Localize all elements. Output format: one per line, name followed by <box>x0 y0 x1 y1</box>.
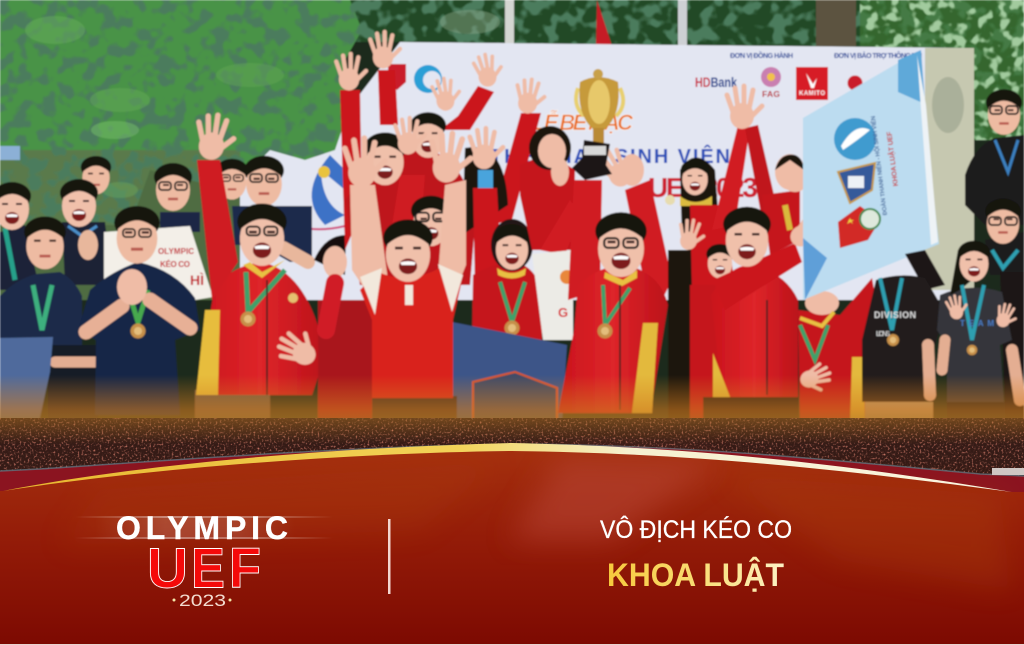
event backdrop <box>240 42 974 300</box>
wordmark UEF: U <box>147 536 188 600</box>
photo scene <box>0 0 1024 418</box>
wordmark UEF <box>147 536 261 600</box>
person: back woman with trophy hand <box>520 126 580 255</box>
small blue banner at left edge <box>0 146 20 160</box>
sponsor logos <box>695 50 922 100</box>
lower red banner <box>0 443 1024 645</box>
person: right side students in black: TEAM <box>960 319 994 328</box>
person: black t-shirt student <box>862 250 945 468</box>
gold trophy <box>572 69 623 180</box>
closing ceremony headline: THỂ THAO SINH VIÊN <box>490 144 730 168</box>
sponsor logos: HDBank <box>695 74 737 90</box>
person: woman covering face in red <box>762 154 805 255</box>
white sign: OLYMPIC <box>158 247 194 256</box>
closing ceremony headline: LỄ BẾ MẠC <box>533 110 634 135</box>
tree canopy left <box>0 0 365 230</box>
sign behind centre <box>532 250 574 340</box>
divider line <box>388 519 390 594</box>
background foliage <box>0 0 1024 460</box>
person: girl with gold medal <box>665 86 782 420</box>
year: 2023 <box>179 591 226 610</box>
person: man holding trophy <box>558 143 672 413</box>
person: red shirt man centre with both arms raised <box>345 131 473 422</box>
navy banner flag <box>450 322 567 425</box>
white sign <box>104 226 213 300</box>
person: navy polo student left <box>0 216 98 420</box>
person: right side students in black <box>937 89 1024 442</box>
stadium crowd strip <box>0 418 1024 480</box>
wordmark UEF: E <box>191 536 225 600</box>
person: navy polo student clapping <box>78 206 200 415</box>
flagpoles and red flag <box>505 0 687 46</box>
big blue team board: KHOA LUẬT UEF <box>884 130 900 187</box>
big blue team board <box>803 50 939 300</box>
red field <box>0 451 1024 644</box>
sponsor logos: FAG <box>762 89 780 99</box>
person: woman in red jacket with blue wristband <box>470 128 542 340</box>
back row left students <box>0 156 312 300</box>
wordmark Olympic: OLYMPIC <box>116 510 288 546</box>
white sign: KÉO CO <box>160 260 190 269</box>
gold curved stripe <box>3 443 1012 492</box>
wordmark UEF: F <box>229 536 261 600</box>
person: black t-shirt student: LIONS <box>876 331 890 338</box>
person: red jacket man left with raised arm <box>194 113 324 420</box>
raised arms group in back row <box>336 32 546 285</box>
person: red girl behind left <box>314 235 372 420</box>
big blue team board: ĐOÀN THANH NIÊN - HỘI SINH VIÊN <box>869 116 889 216</box>
person: red jacket man arm pointing <box>703 207 832 422</box>
speed lines behind wordmark <box>75 516 333 539</box>
closing ceremony headline <box>490 110 758 203</box>
field light rays <box>60 458 1010 590</box>
person: red jacket man right <box>797 278 876 430</box>
year <box>172 591 232 610</box>
flag held at left <box>0 337 53 440</box>
person: black t-shirt student: DIVISION <box>874 310 916 320</box>
sponsor logos: ĐƠN VỊ BẢO TRỢ THÔNG TIN <box>834 51 922 60</box>
top treeline right <box>340 0 1024 140</box>
heading: faculty name: KHOA LUẬT <box>607 557 784 593</box>
sponsor logos: ĐƠN VỊ ĐỒNG HÀNH <box>730 50 793 60</box>
sign behind centre: G <box>558 305 568 320</box>
logo: Olympic UEF 2023 <box>75 510 333 610</box>
heading: champion text: VÔ ĐỊCH KÉO CO <box>600 515 792 544</box>
golden glow at the foot of the photo <box>0 375 1024 421</box>
white sign: HÌ <box>190 272 204 288</box>
closing ceremony headline: UEF 2023 <box>648 172 758 203</box>
sponsor logos: KAMITO <box>799 91 825 97</box>
crimson upper band <box>0 444 1024 645</box>
